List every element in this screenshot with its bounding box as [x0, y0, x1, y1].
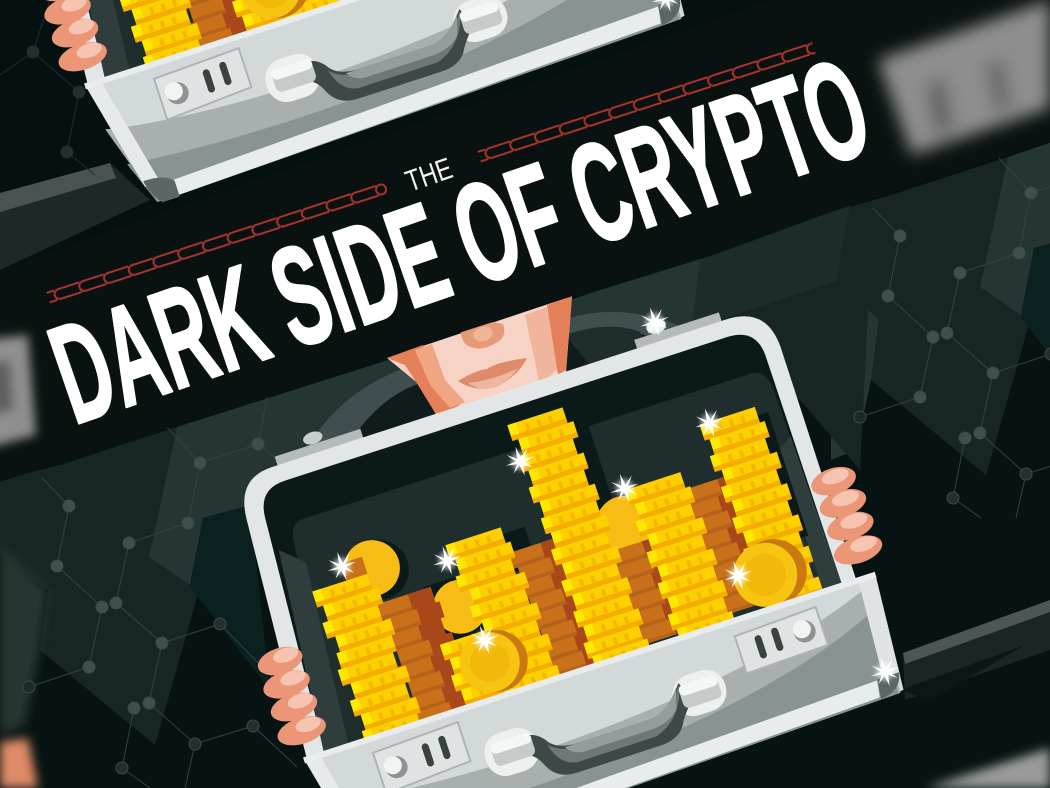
briefcase main — [187, 262, 932, 788]
title banner — [0, 0, 1050, 482]
handle — [479, 662, 737, 788]
case body — [303, 572, 917, 788]
person: face — [387, 296, 572, 425]
network: blockchain nodes left — [23, 397, 297, 788]
lock right — [734, 607, 829, 673]
chain left — [46, 181, 388, 304]
briefcase upper (repeat of main) — [0, 0, 713, 219]
coin stacks: front gold — [282, 348, 825, 748]
hand left — [251, 641, 330, 751]
coin front right — [725, 531, 815, 616]
lid interior — [240, 327, 843, 756]
stack shadows — [322, 355, 825, 727]
chain right — [477, 41, 816, 163]
blurred neighbouring panel: left fragment — [0, 335, 36, 450]
shelf strip right — [900, 600, 1050, 700]
coins behind stacks — [337, 454, 669, 663]
network: blockchain nodes right — [854, 127, 1050, 518]
blurred neighbouring panel: title fragment bottom right — [925, 748, 1050, 788]
lid latches — [271, 300, 722, 466]
person: hood — [295, 312, 700, 520]
lock left — [372, 722, 472, 788]
title word: THE: THE — [402, 152, 457, 199]
sparkles — [281, 268, 904, 788]
network: blockchain nodes top left — [0, 0, 95, 175]
blurred neighbouring panel: title fragment top right — [878, 0, 1050, 155]
hand right — [808, 460, 886, 570]
coin stacks: back orange — [371, 472, 785, 730]
coin front left — [452, 622, 536, 702]
lid frame — [218, 306, 857, 761]
blurred neighbouring panel: hand bottom left — [0, 738, 38, 788]
